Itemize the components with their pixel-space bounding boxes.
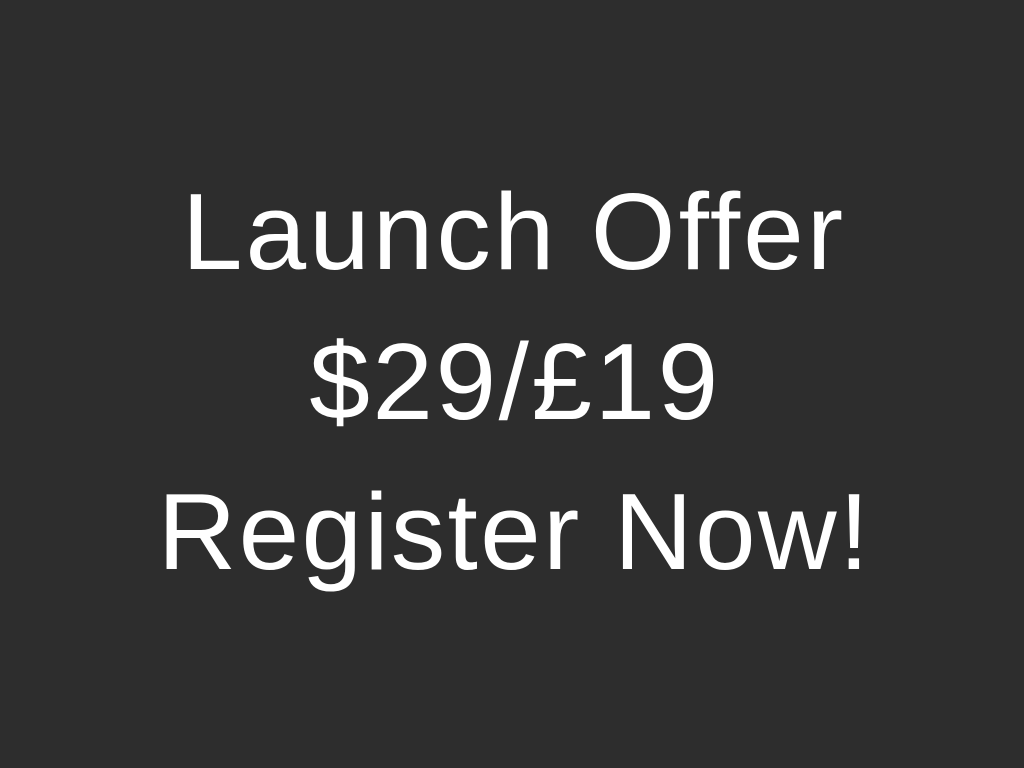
call to action: register now: Register Now! — [158, 471, 871, 593]
heading: launch offer: Launch Offer — [182, 171, 846, 293]
price: $29/£19: $29/£19 — [309, 321, 721, 443]
